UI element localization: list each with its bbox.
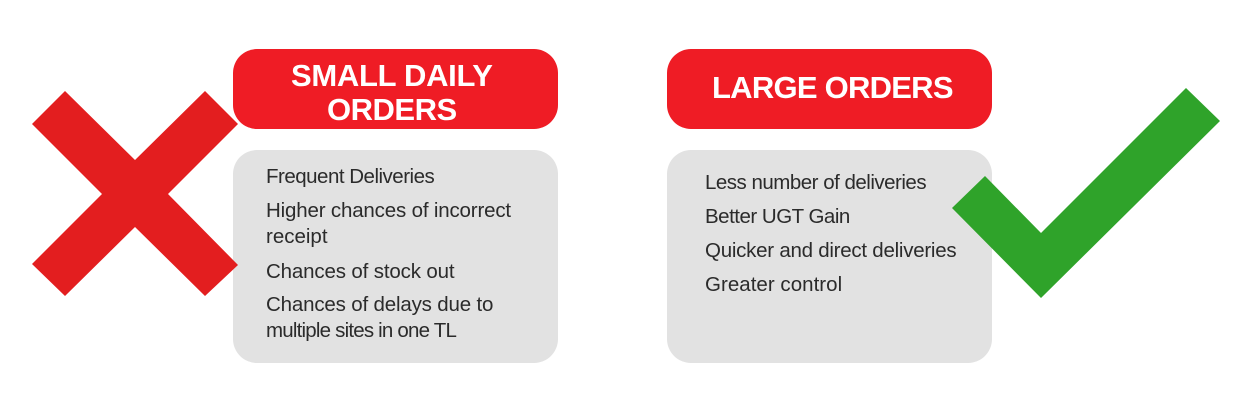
text: incorrect receipt: Higher chances of incorrect: [266, 199, 511, 222]
panel: large orders list: [667, 150, 992, 363]
panel: small daily orders list: [233, 150, 558, 363]
text: greater control: Greater control: [705, 273, 842, 296]
text: delays: multiple sites in one TL: [266, 319, 456, 342]
panel: small daily orders heading: SMALL DAILY: [291, 58, 493, 93]
panel: small daily orders heading: [233, 49, 558, 129]
text: less deliveries: Less number of deliveries: [705, 171, 926, 194]
panel: small daily orders heading: ORDERS: [327, 92, 457, 127]
panel: large orders heading: [667, 49, 992, 129]
panel: large orders heading: LARGE ORDERS: [712, 70, 953, 105]
text: incorrect receipt: receipt: [266, 225, 328, 248]
text: delays: [266, 293, 493, 342]
text: UGT gain: Better UGT Gain: [705, 205, 850, 228]
text: stock out: Chances of stock out: [266, 260, 454, 283]
text: frequent deliveries: Frequent Deliveries: [266, 165, 434, 188]
text: incorrect receipt: [266, 199, 511, 248]
text: delays: Chances of delays due to: [266, 293, 493, 316]
text: quicker deliveries: Quicker and direct deliveries: [705, 239, 956, 262]
